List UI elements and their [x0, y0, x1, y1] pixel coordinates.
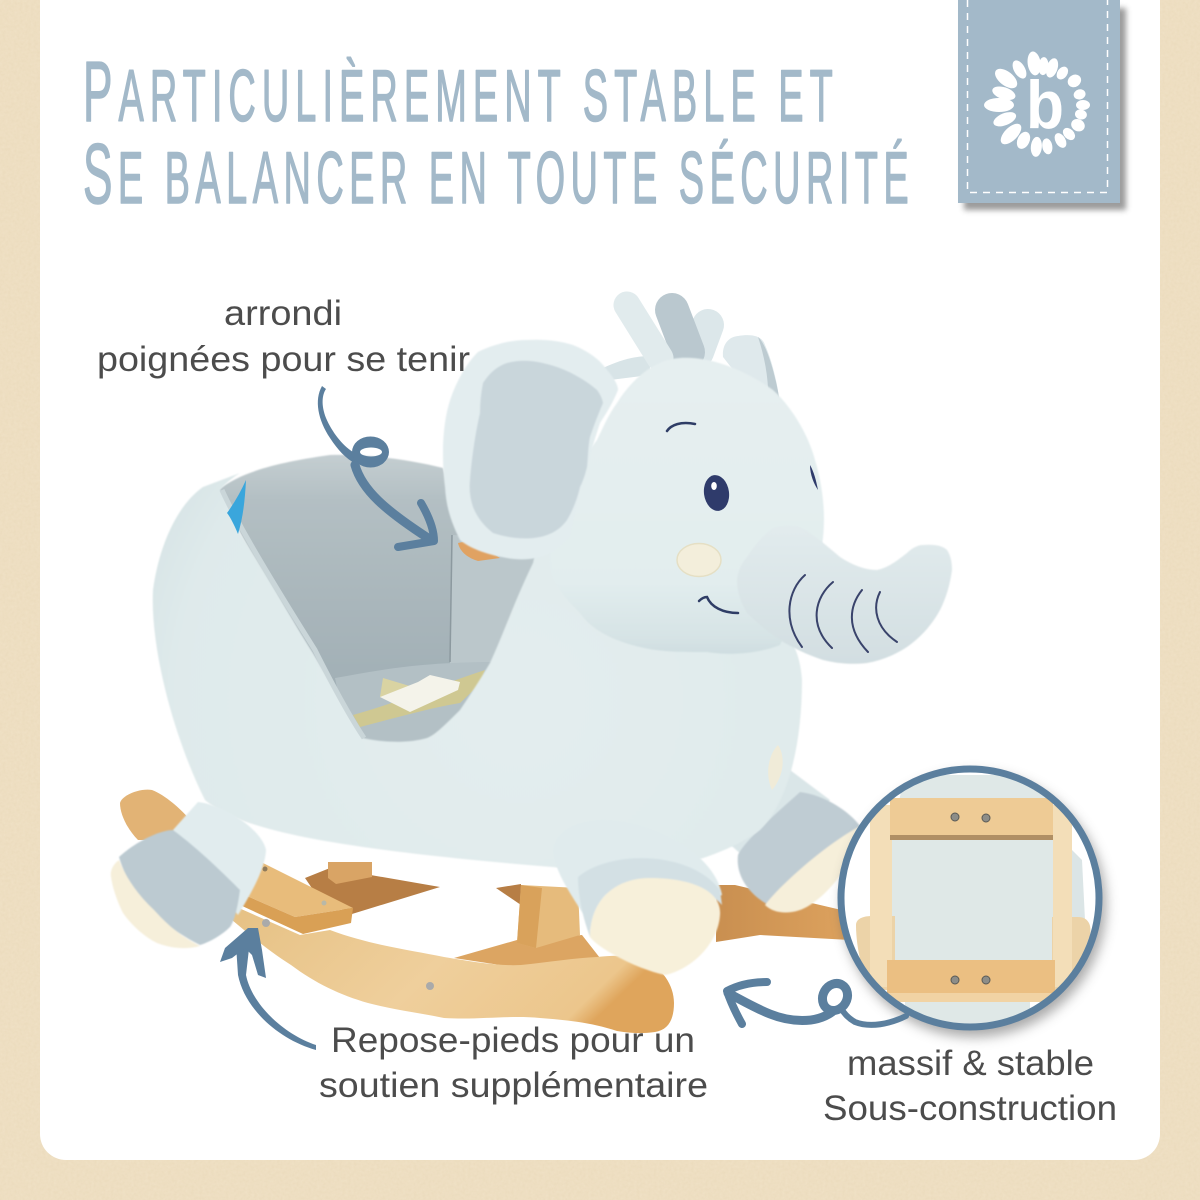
ear — [443, 340, 618, 559]
wooden rockers and base — [120, 790, 850, 1033]
label: footrest: Repose-pieds pour un — [331, 1021, 695, 1060]
label: footrest — [319, 1021, 708, 1105]
title: PARTICULIÈREMENT STABLE ET — [83, 46, 833, 140]
backrest — [218, 455, 540, 770]
title — [83, 46, 909, 222]
screws — [951, 813, 990, 984]
label: handles: poignées pour se tenir — [97, 340, 470, 379]
face — [667, 423, 818, 613]
body — [153, 473, 802, 873]
front right foot — [553, 820, 722, 975]
arrow: undercarriage — [727, 979, 906, 1025]
eyebrow — [667, 423, 695, 431]
label: handles — [97, 294, 470, 379]
rocking horse illustration: elephant — [111, 305, 952, 1033]
bottom crossbar — [887, 960, 1055, 993]
side rails — [870, 805, 892, 987]
side cushion — [450, 535, 545, 668]
side plates — [856, 916, 895, 990]
title: SE BALANCER EN TOUTE SÉCURITÉ — [83, 128, 909, 222]
cheek — [677, 544, 721, 576]
eye — [702, 473, 731, 513]
handle — [458, 540, 500, 561]
head — [550, 358, 824, 654]
inset detail circle — [841, 769, 1106, 1037]
arrow: footrest — [220, 928, 316, 1050]
cushion seam — [450, 535, 452, 662]
arrow: handles — [318, 386, 434, 547]
logo letter: b — [1026, 67, 1064, 143]
harness strap — [353, 670, 485, 727]
far eye — [810, 465, 818, 490]
seat cushion — [335, 662, 495, 770]
seat rim — [222, 490, 364, 738]
trunk wrinkles — [789, 575, 897, 652]
blue tag — [227, 480, 246, 534]
logo flower — [984, 51, 1090, 157]
seat interior — [218, 455, 545, 770]
label: undercarriage: massif & stable — [847, 1044, 1094, 1083]
label: undercarriage: Sous-construction — [823, 1089, 1117, 1128]
label: handles: arrondi — [224, 294, 342, 333]
logo tag — [958, 0, 1126, 210]
mouth — [699, 597, 738, 613]
rump patch — [768, 745, 783, 790]
front left foot — [111, 802, 266, 948]
trunk — [737, 526, 952, 664]
seat underside — [890, 775, 1053, 960]
label: undercarriage — [823, 1044, 1117, 1128]
harness buckle — [380, 675, 460, 712]
head tufts — [603, 305, 780, 405]
top crossbar — [890, 798, 1053, 835]
rear right foot — [725, 770, 860, 912]
label: footrest: soutien supplémentaire — [319, 1066, 708, 1105]
